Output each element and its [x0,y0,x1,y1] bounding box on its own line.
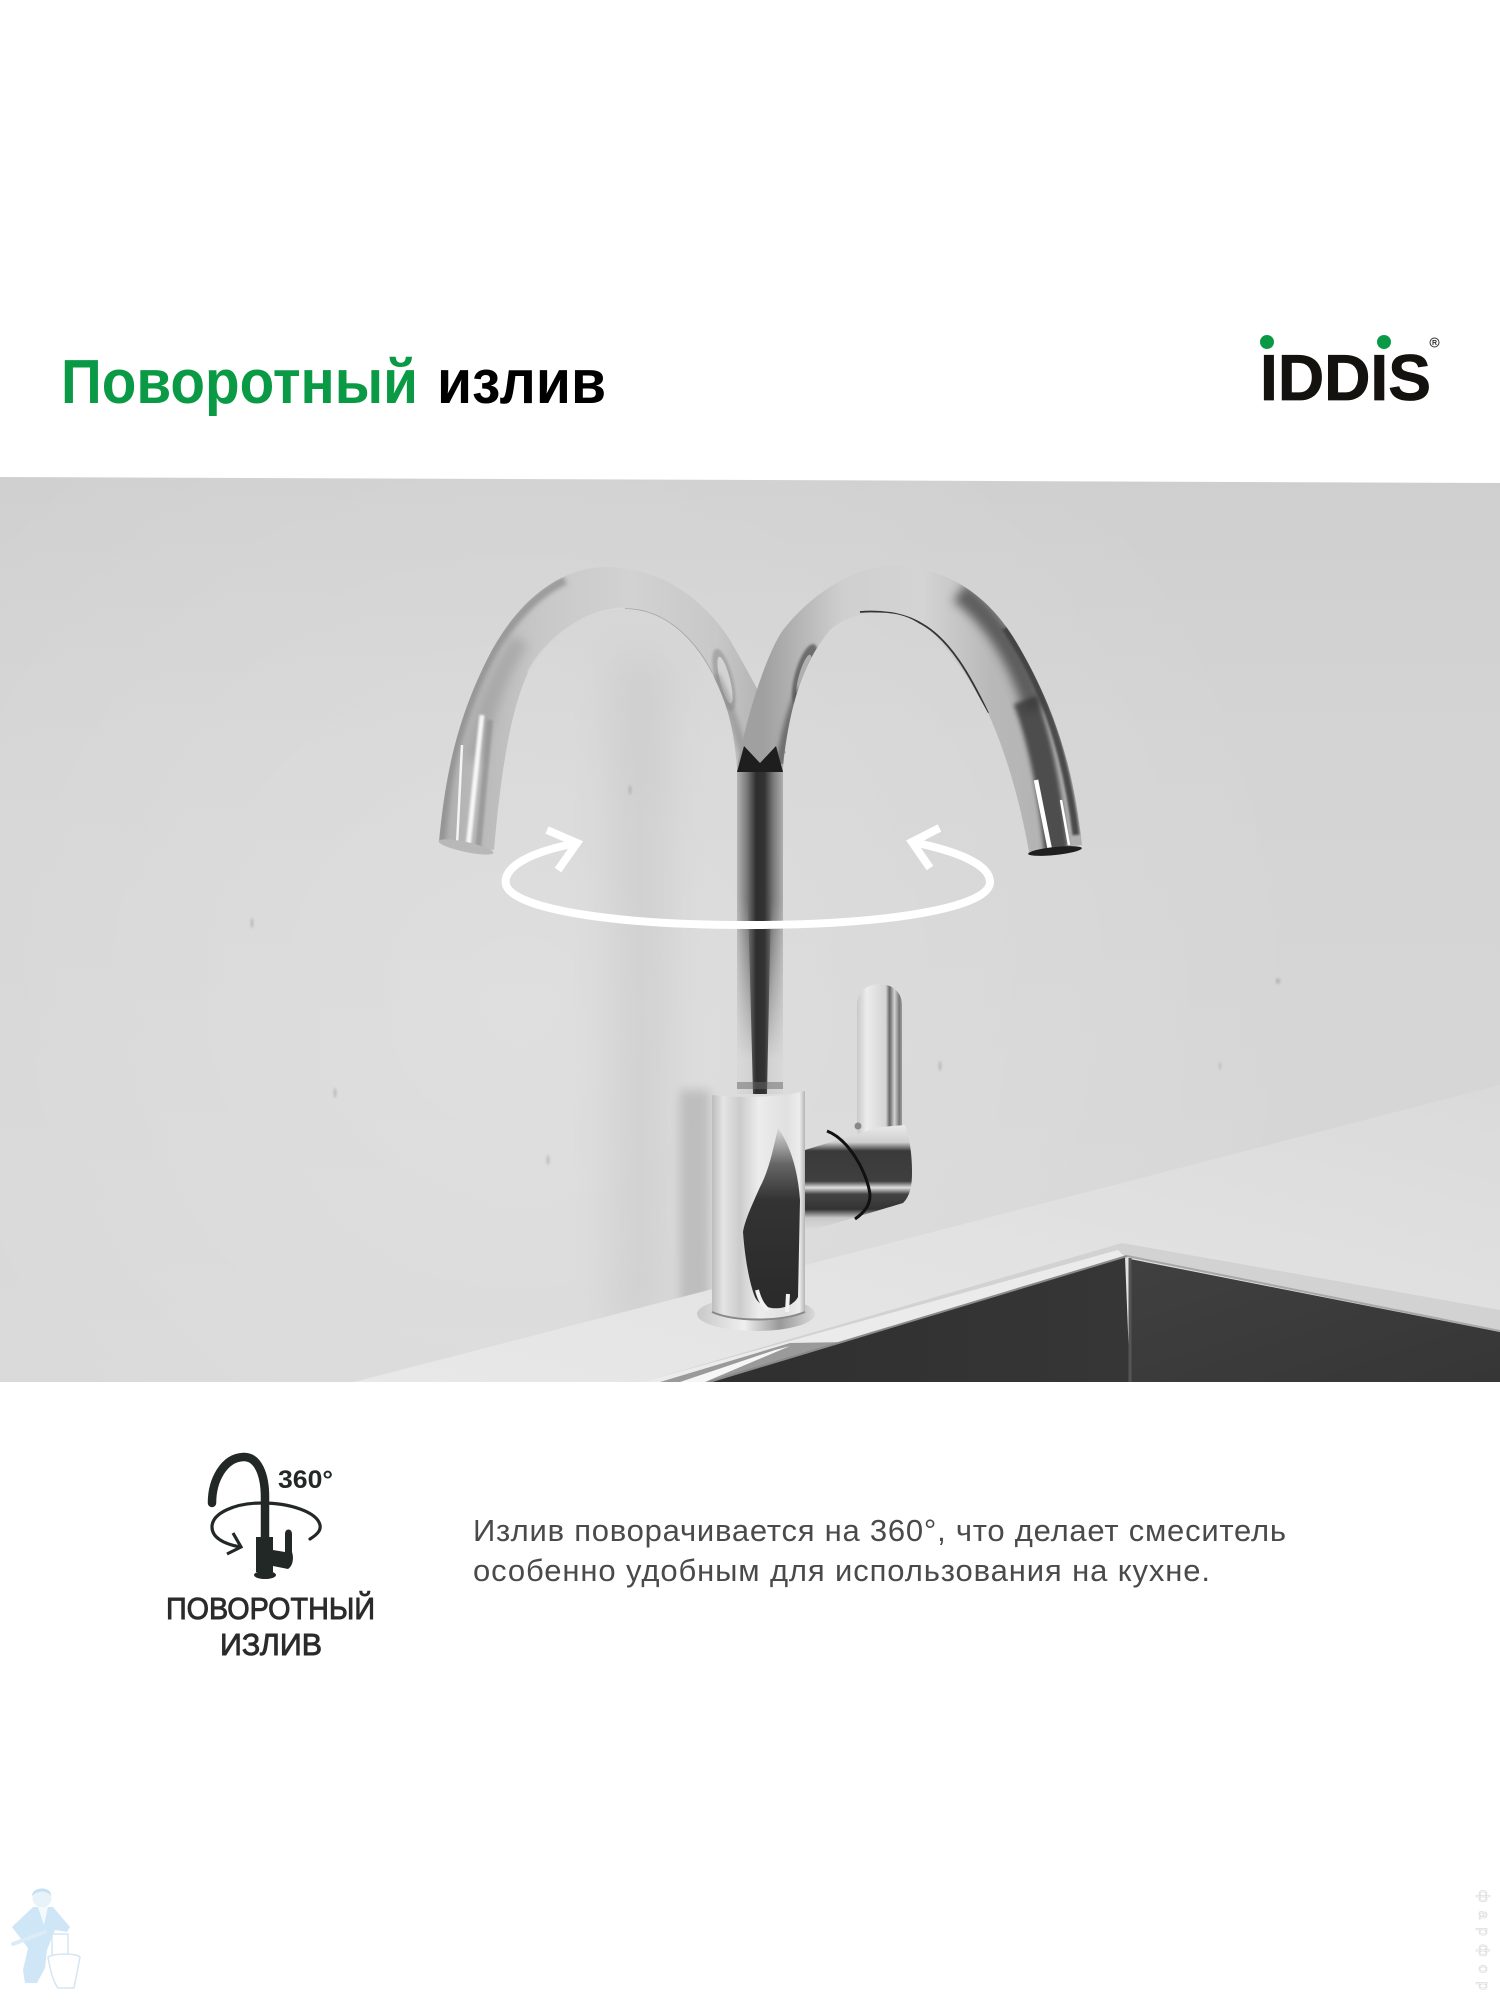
faucet: side lever and cylinder [803,984,912,1233]
icon label: ИЗЛИВ [220,1627,322,1662]
faucet: left spout position [438,567,786,858]
faucet: base flange [697,1303,815,1331]
faucet: right spout position [737,566,1082,858]
description text [473,1513,1286,1588]
icon: 360 swivel faucet: 360° [278,1466,333,1494]
description text: особенно удобным для использования на кухне. [473,1553,1210,1588]
title: Поворотный [61,348,418,417]
logo: IDDIS: R [1432,340,1437,347]
icon: 360 swivel faucet [212,1457,333,1579]
logo: IDDIS: IDDIS [1260,342,1431,414]
countertop [356,1193,1500,1382]
rotation arrow [506,828,990,925]
sink [642,1243,1500,1382]
title: излив [437,348,606,417]
panel: faucet photo [0,470,1500,1385]
icon label: ПОВОРОТНЫЙ [166,1590,375,1626]
faucet: stem [737,746,783,1094]
description text: Излив поворачивается на 360°, что делает смеситель [473,1513,1286,1548]
watermark: plumber with toilet [12,1888,80,1988]
watermark: vertical site text: фарфор [1475,1890,1492,1990]
faucet: body cylinder [712,1091,805,1320]
icon label [166,1590,375,1662]
